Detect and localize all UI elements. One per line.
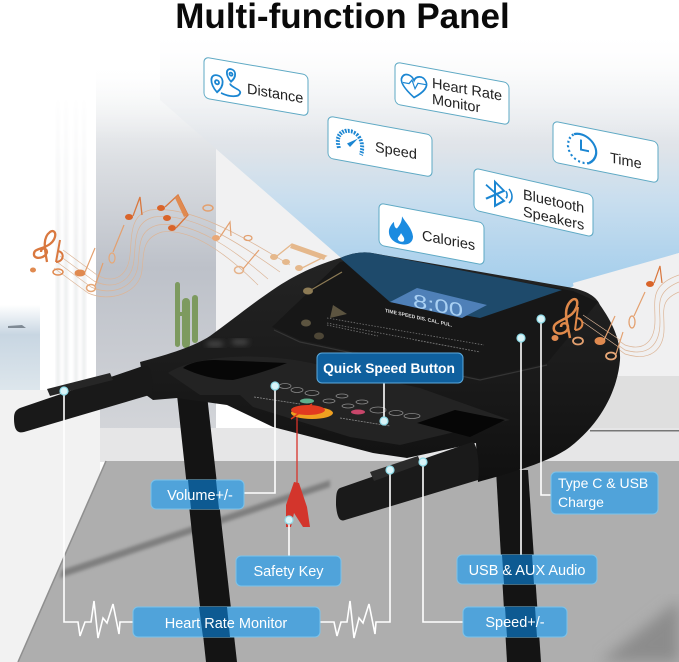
- label: Calories: [422, 228, 475, 254]
- left handle: [14, 366, 153, 432]
- label: Distance: [247, 82, 303, 107]
- callout: Volume+/-: [151, 480, 244, 509]
- marker dots: [60, 315, 545, 524]
- blue tinted console top: [340, 252, 562, 318]
- right music notes: [583, 266, 679, 356]
- left music notes: [30, 195, 326, 297]
- treble clef and notes on console: [552, 299, 623, 360]
- callout: Type C and USB Charge: Charge: [558, 494, 604, 510]
- pink button: [351, 410, 365, 414]
- callout: Heart Rate Monitor: Heart Rate Monitor: [165, 616, 287, 632]
- callout: Volume+/-: Volume+/-: [167, 488, 233, 504]
- callout: Quick Speed Button: [317, 353, 463, 383]
- callout: Safety Key: Safety Key: [253, 564, 324, 580]
- red safety lever: [291, 404, 333, 419]
- callout: Speed+/-: [463, 607, 567, 637]
- console progress ticks: [327, 318, 484, 352]
- tablet holder: [272, 256, 598, 378]
- left handle buttons: [47, 373, 113, 396]
- right handle: [336, 442, 479, 520]
- leader lines and heartbeat traces: [64, 319, 551, 638]
- callout: Safety Key: [236, 556, 341, 586]
- display labels: TIME SPEED DIS. CAL. PUL.: [385, 308, 453, 329]
- callout: USB and AUX Audio: USB & AUX Audio: [469, 563, 585, 579]
- card: Heart Rate Monitor: [395, 62, 509, 125]
- label: Bluetooth: [523, 187, 584, 217]
- icon: flame: [389, 214, 413, 246]
- label line 2: Monitor: [432, 92, 480, 117]
- callout: Quick Speed Button: Quick Speed Button: [323, 361, 455, 376]
- notes overlay on console: [301, 272, 347, 340]
- callout: USB and AUX Audio: [457, 555, 597, 584]
- display screen: 8:00: [413, 291, 463, 322]
- callout: Speed+/-: Speed+/-: [485, 615, 545, 631]
- right handle buttons: [370, 456, 421, 481]
- icon: speedometer: [338, 129, 362, 155]
- label: Speed: [375, 140, 417, 163]
- cactus: [175, 282, 198, 348]
- card: Speed: [328, 116, 432, 177]
- icon: red safety key clip: [286, 482, 310, 527]
- icon: bluetooth speaker: [486, 180, 512, 210]
- label: Time: [610, 151, 642, 173]
- card: Calories: [379, 203, 484, 265]
- right cup holder: [417, 410, 505, 437]
- body highlights: [206, 339, 249, 347]
- button panel: [254, 384, 420, 426]
- green button: [300, 398, 314, 404]
- label line 2: Speakers: [523, 204, 584, 234]
- icon: map pins: [211, 66, 240, 98]
- tablet ledge edge: [274, 330, 547, 380]
- callout: Heart Rate Monitor: [133, 607, 320, 637]
- card: Time: [553, 121, 658, 183]
- display screen: [390, 288, 487, 322]
- card: Bluetooth Speakers: [474, 168, 593, 237]
- left cup holder: [183, 360, 287, 380]
- left legs of treadmill: [177, 395, 237, 662]
- right leg of treadmill: [496, 470, 541, 662]
- card: Distance: [204, 57, 308, 116]
- callout: Type C and USB Charge: [551, 472, 658, 514]
- icon: clock: [568, 132, 596, 165]
- callout: Type C and USB Charge: Type C & USB: [558, 475, 648, 491]
- safety key cord: [296, 412, 298, 493]
- label: Heart Rate: [432, 76, 502, 105]
- icon: heart pulse: [401, 73, 427, 100]
- treadmill console: [14, 252, 623, 520]
- lower tray: [168, 357, 510, 445]
